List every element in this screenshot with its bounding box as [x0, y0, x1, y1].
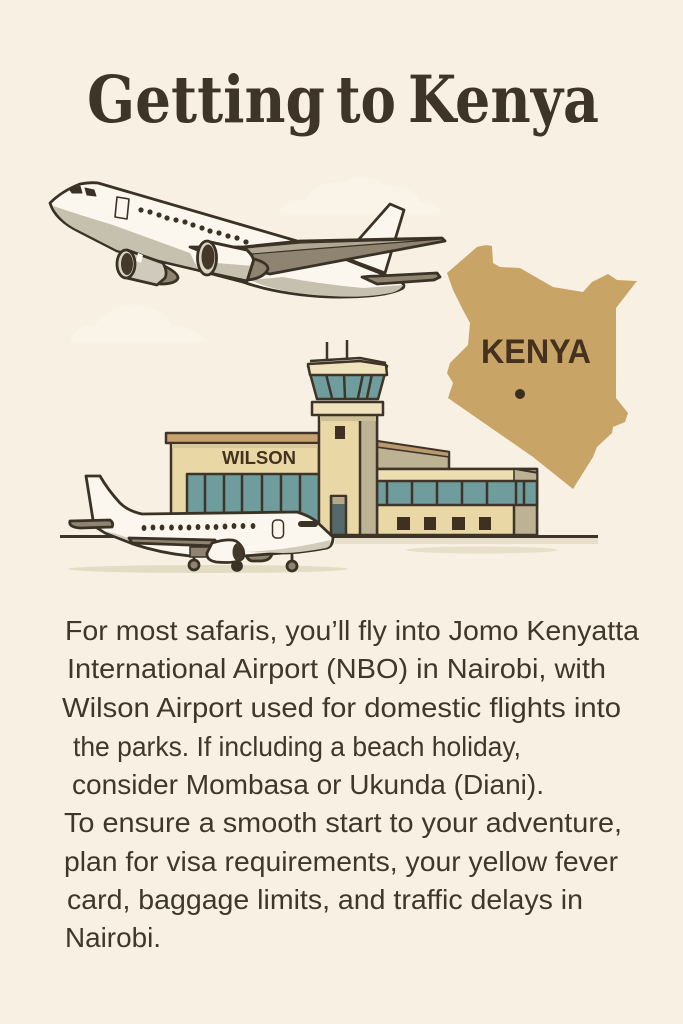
tower window	[335, 426, 345, 439]
paragraph 1: consider Mombasa or Ukunda (Diani).	[72, 769, 544, 800]
right terminal wing	[370, 469, 537, 535]
rear engine	[117, 250, 178, 285]
tower collar	[312, 402, 383, 415]
paragraph 1: For most safaris, you’ll fly into Jomo Kenyatta	[65, 615, 639, 646]
paragraph 1	[62, 615, 639, 800]
cockpit windows	[70, 186, 96, 196]
ground floor windows	[397, 517, 491, 530]
map: Kenya	[447, 245, 637, 489]
paragraph 1: International Airport (NBO) in Nairobi, with	[67, 653, 606, 684]
fuselage	[86, 476, 333, 556]
illustration: parked airplane	[70, 476, 333, 571]
title: Getting	[87, 62, 325, 138]
terminal sign: WILSON	[222, 448, 296, 468]
ground shadow: right	[406, 546, 558, 554]
belly shading	[103, 530, 330, 553]
title: to	[336, 62, 396, 138]
door	[272, 520, 284, 538]
tail fin	[345, 204, 404, 273]
rear building	[376, 441, 449, 470]
tower shaft	[319, 414, 377, 535]
illustration: Wilson Airport terminal	[166, 340, 537, 536]
ground line	[60, 535, 598, 538]
fuselage	[50, 183, 404, 297]
fuselage belly shading	[53, 206, 403, 297]
paragraph 2: To ensure a smooth start to your adventure,	[64, 807, 622, 838]
wing	[190, 238, 445, 274]
map marker: Nairobi	[515, 389, 525, 399]
cab	[308, 366, 387, 399]
right wing glazing	[370, 481, 537, 505]
ground shadow: plane	[68, 565, 348, 573]
background cloud: lower	[70, 306, 206, 342]
left terminal wing	[166, 433, 319, 536]
engine	[207, 540, 244, 562]
cockpit window	[298, 521, 318, 527]
map label: KENYA	[481, 333, 591, 371]
paragraph 2: Nairobi.	[65, 922, 161, 953]
paragraph 2	[64, 807, 622, 953]
paragraph 2: card, baggage limits, and traffic delays in	[67, 884, 583, 915]
control tower	[308, 340, 387, 535]
stabiliser	[70, 520, 113, 528]
terminal glazing	[187, 474, 319, 536]
ground shading	[335, 538, 598, 544]
paragraph 1: Wilson Airport used for domestic flights into	[62, 692, 621, 723]
tail stabiliser	[362, 273, 440, 284]
antennas	[327, 340, 347, 360]
cabin windows	[142, 523, 255, 531]
illustration: airplane taking off	[50, 183, 445, 297]
door	[115, 197, 129, 219]
paragraph 2: plan for visa requirements, your yellow fever	[64, 846, 618, 877]
title: Kenya	[408, 62, 599, 138]
tower door	[331, 496, 346, 535]
body text	[62, 615, 639, 953]
background cloud: upper	[278, 177, 442, 214]
wing	[129, 538, 217, 546]
nose gear and main gear	[189, 554, 297, 571]
cabin windows	[138, 207, 249, 245]
front engine	[198, 241, 268, 281]
paragraph 1: the parks. If including a beach holiday,	[73, 731, 521, 762]
wing pylon	[190, 547, 210, 557]
